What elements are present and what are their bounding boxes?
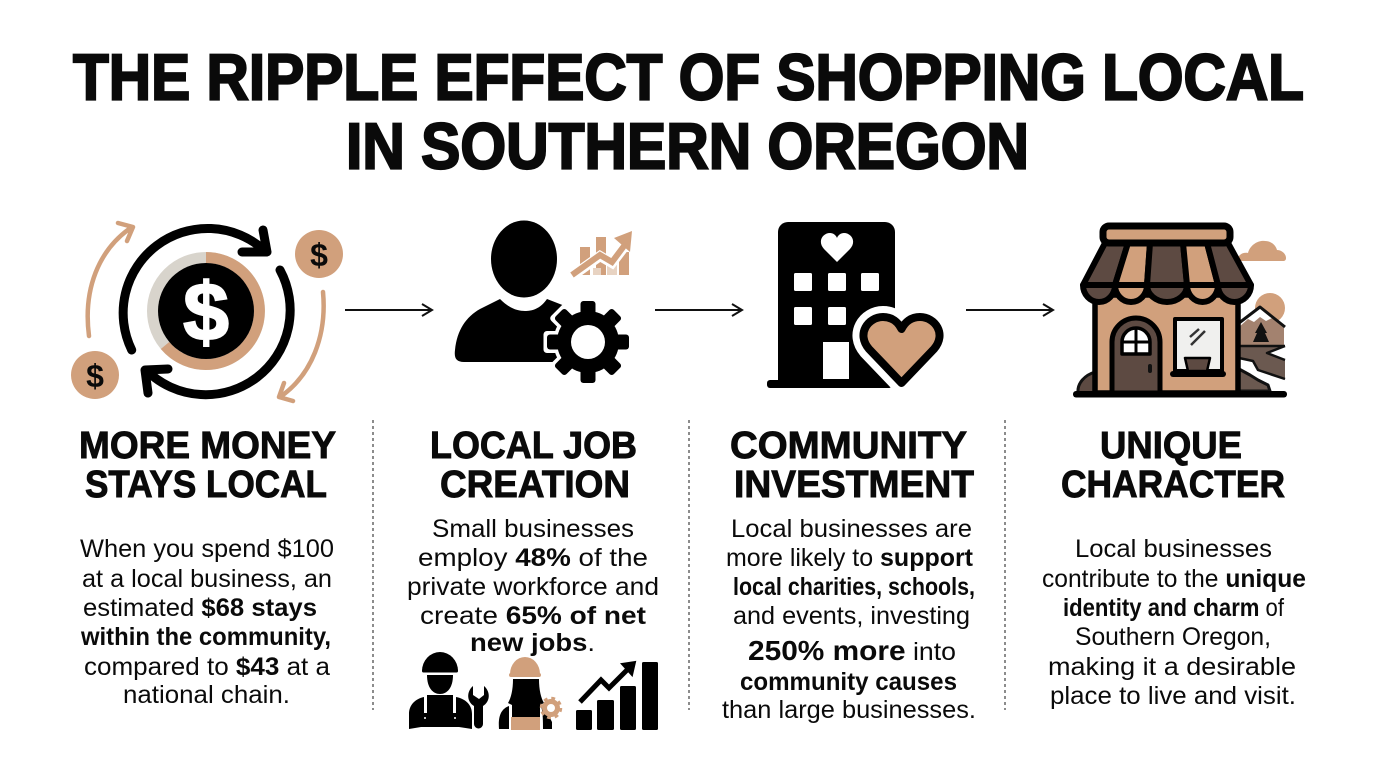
text block: at a local business, an (82, 565, 332, 593)
text block: When you spend $100 (80, 535, 334, 563)
heading: CHARACTER (1061, 464, 1285, 506)
icon: money circulating: $ (86, 358, 104, 394)
panel: local job creation (407, 425, 659, 730)
text block: estimated $68 stays (83, 594, 317, 622)
text block: making it a desirable (1048, 653, 1296, 681)
heading: STAYS LOCAL (85, 464, 327, 506)
title: IN SOUTHERN OREGON (346, 110, 1029, 182)
icon: person with gear (455, 220, 632, 383)
text block: Local businesses are (731, 515, 972, 543)
icon: money circulating (71, 223, 343, 401)
text block (722, 515, 976, 724)
panel: more money stays local (79, 425, 336, 709)
text block: more likely to support (726, 544, 974, 572)
text block (80, 535, 334, 709)
text block: private workforce and (407, 573, 659, 601)
text block: and events, investing (733, 602, 970, 630)
icon: storefront with landscape (1073, 226, 1287, 398)
panel: unique character (1042, 425, 1306, 710)
icon: worker with gear (499, 657, 560, 730)
heading: MORE MONEY (79, 425, 336, 467)
text block (1042, 535, 1306, 710)
text block: community causes (740, 668, 957, 696)
text block: within the community, (80, 623, 331, 651)
text block (407, 515, 659, 657)
icon: building with heart (767, 222, 940, 388)
heading: CREATION (440, 464, 630, 506)
text block: national chain. (123, 681, 290, 709)
column dividers (373, 420, 1005, 710)
heading: COMMUNITY (730, 425, 967, 467)
heading (730, 425, 974, 506)
text block: compared to $43 at a (84, 653, 330, 681)
text block: identity and charm of (1063, 594, 1284, 622)
heading (79, 425, 336, 506)
text block: contribute to the unique (1042, 565, 1306, 593)
text block: Local businesses (1075, 535, 1272, 563)
panel: community investment (722, 425, 976, 724)
icon: money circulating: $ (183, 267, 229, 358)
heading: INVESTMENT (734, 464, 974, 506)
heading: LOCAL JOB (430, 425, 637, 467)
text block: 250% more into (748, 635, 956, 666)
heading: UNIQUE (1100, 425, 1242, 467)
text block: create 65% of net (420, 602, 647, 630)
text block: Small businesses (432, 515, 634, 543)
text block: new jobs . (470, 629, 595, 657)
icon: money circulating: $ (310, 237, 328, 273)
text block: than large businesses. (722, 696, 976, 724)
text block: local charities, schools, (733, 573, 975, 601)
arrow (655, 304, 742, 316)
arrow (345, 304, 432, 316)
text block: place to live and visit. (1050, 682, 1296, 710)
text block: Southern Oregon, (1075, 623, 1271, 651)
heading (430, 425, 637, 506)
icon: rising bar chart (576, 662, 658, 730)
icon: worker with wrench (409, 652, 489, 729)
arrow (966, 304, 1053, 316)
heading (1061, 425, 1285, 506)
text block: employ 48% of the (418, 544, 648, 572)
title (73, 40, 1304, 182)
